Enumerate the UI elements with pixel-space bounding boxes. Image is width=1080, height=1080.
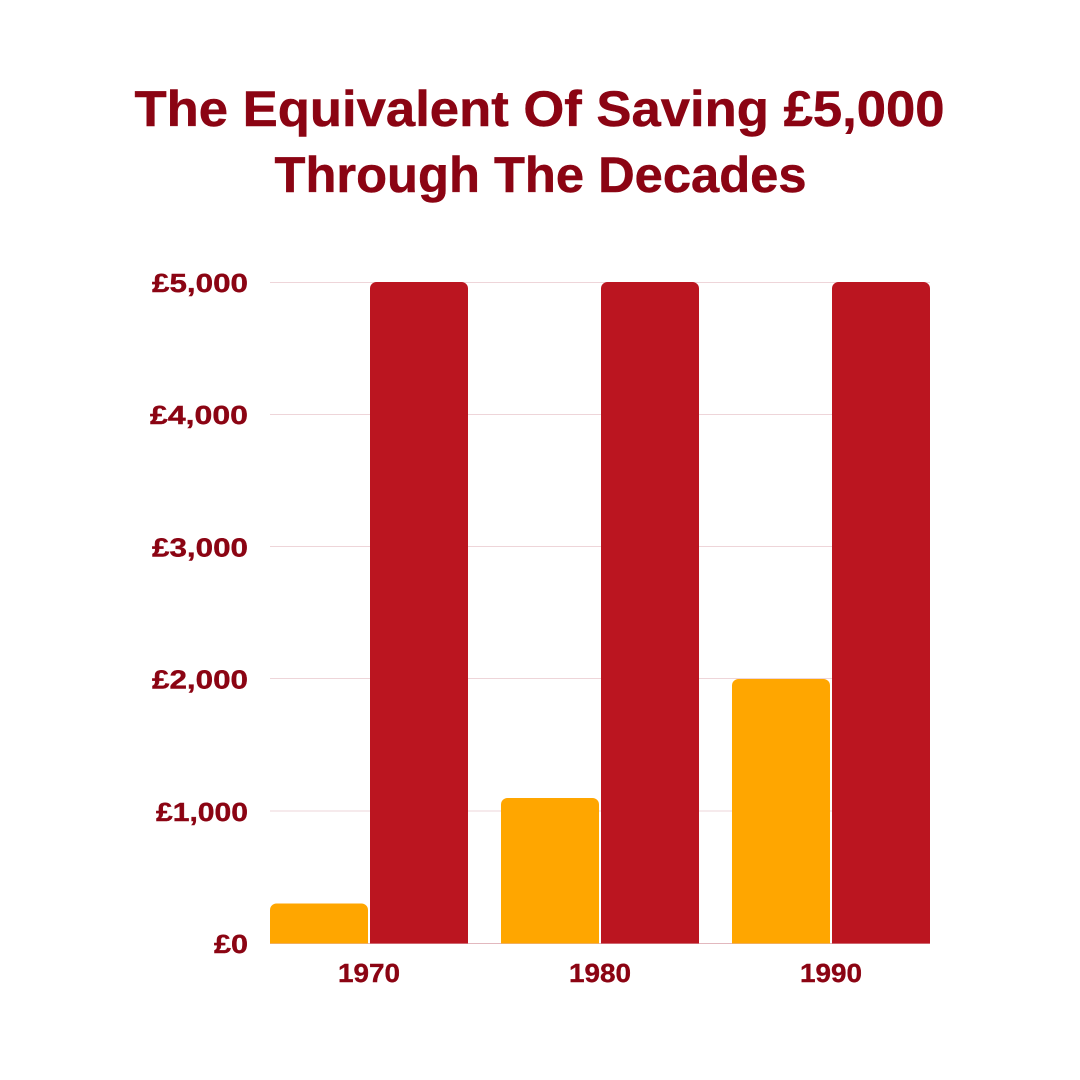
y-axis labels: £4,000 — [150, 400, 248, 430]
title: Through The Decades — [274, 147, 806, 203]
bar chart — [150, 268, 930, 988]
y-axis labels: £2,000 — [152, 664, 248, 694]
title: The Equivalent Of Saving £5,000 — [134, 81, 944, 137]
x-axis labels: 1970 — [338, 958, 400, 988]
title — [134, 81, 944, 203]
y-axis labels: £3,000 — [152, 532, 248, 562]
bars: 1990 — [732, 282, 930, 944]
x-axis labels: 1980 — [569, 958, 631, 988]
y-axis labels: £5,000 — [152, 268, 248, 298]
y-axis labels: £0 — [214, 929, 248, 959]
y-axis labels: £1,000 — [156, 797, 248, 827]
bars: 1980 — [501, 282, 699, 944]
x-axis labels — [338, 958, 862, 988]
x-axis labels: 1990 — [800, 958, 862, 988]
bars: 1970 — [270, 282, 468, 944]
y-axis labels — [150, 268, 248, 959]
